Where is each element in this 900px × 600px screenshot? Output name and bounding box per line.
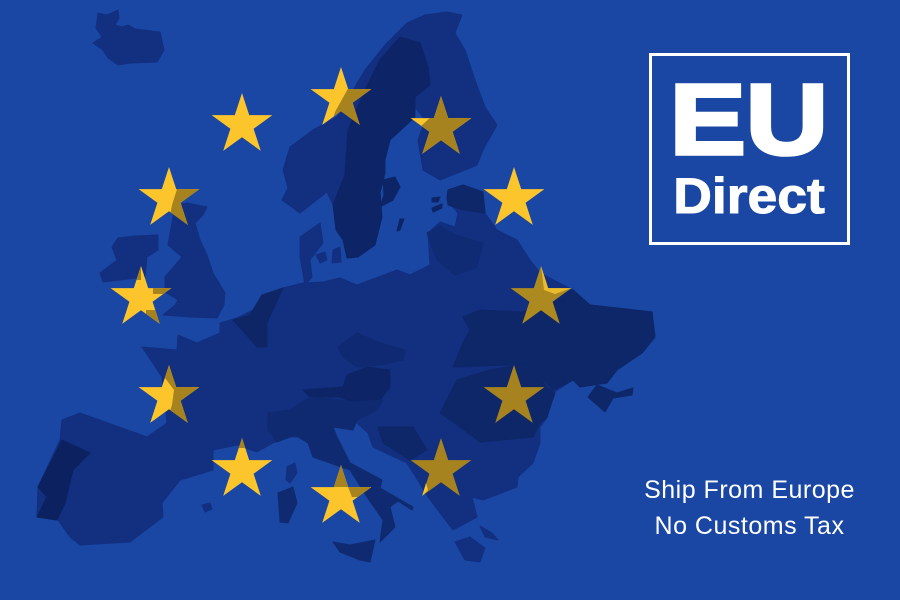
star 7 o'clock xyxy=(212,438,272,496)
Czechia xyxy=(338,333,405,367)
EU stars ring xyxy=(111,67,571,523)
Romania xyxy=(440,363,555,442)
Finland xyxy=(400,12,497,180)
Benelux xyxy=(233,288,283,347)
mainland Europe xyxy=(37,185,655,545)
Direct heading: Direct xyxy=(673,168,825,224)
map of Europe xyxy=(37,10,655,562)
star 5 o'clock xyxy=(411,438,471,496)
Sicily xyxy=(333,540,375,562)
Denmark xyxy=(300,223,323,285)
Bosnia xyxy=(378,427,427,460)
Danish islands east xyxy=(332,247,341,263)
star bottom xyxy=(311,460,371,523)
Ukraine xyxy=(453,290,655,390)
EU heading: EU xyxy=(670,64,828,175)
Crimea xyxy=(588,385,633,412)
Peloponnese xyxy=(455,537,485,562)
tagline line 2: No Customs Tax xyxy=(655,512,844,540)
Great Britain xyxy=(163,203,225,318)
tagline xyxy=(644,476,855,540)
Stockholm islands xyxy=(380,177,400,207)
Estonian islands small xyxy=(432,204,442,212)
star 1 o'clock xyxy=(410,96,472,154)
star 4 o'clock xyxy=(484,365,544,423)
Austria xyxy=(303,367,390,402)
Sweden xyxy=(333,37,430,258)
star top xyxy=(310,67,372,125)
tagline line 1: Ship From Europe xyxy=(644,476,855,504)
Gotland xyxy=(397,219,404,231)
Belarus patch xyxy=(427,226,483,275)
Sardinia xyxy=(278,487,297,523)
Danish islands xyxy=(316,252,327,263)
Italy xyxy=(268,397,413,542)
Baltic patch xyxy=(447,185,485,213)
star 2 o'clock xyxy=(484,167,544,225)
Corsica xyxy=(286,463,297,483)
Aegean islands xyxy=(480,526,498,540)
star 10 o'clock xyxy=(139,167,200,225)
EU Direct logo box xyxy=(650,54,848,244)
Estonian islands xyxy=(432,197,440,202)
Iceland xyxy=(93,10,164,65)
star 11 o'clock xyxy=(212,93,272,151)
star 8 o'clock xyxy=(139,365,200,425)
Norway and north xyxy=(282,23,407,213)
Portugal xyxy=(37,440,90,520)
Balearic islands xyxy=(202,503,212,512)
Ireland xyxy=(100,235,158,282)
star 9 o'clock xyxy=(111,266,173,326)
star 3 o'clock xyxy=(511,266,571,324)
